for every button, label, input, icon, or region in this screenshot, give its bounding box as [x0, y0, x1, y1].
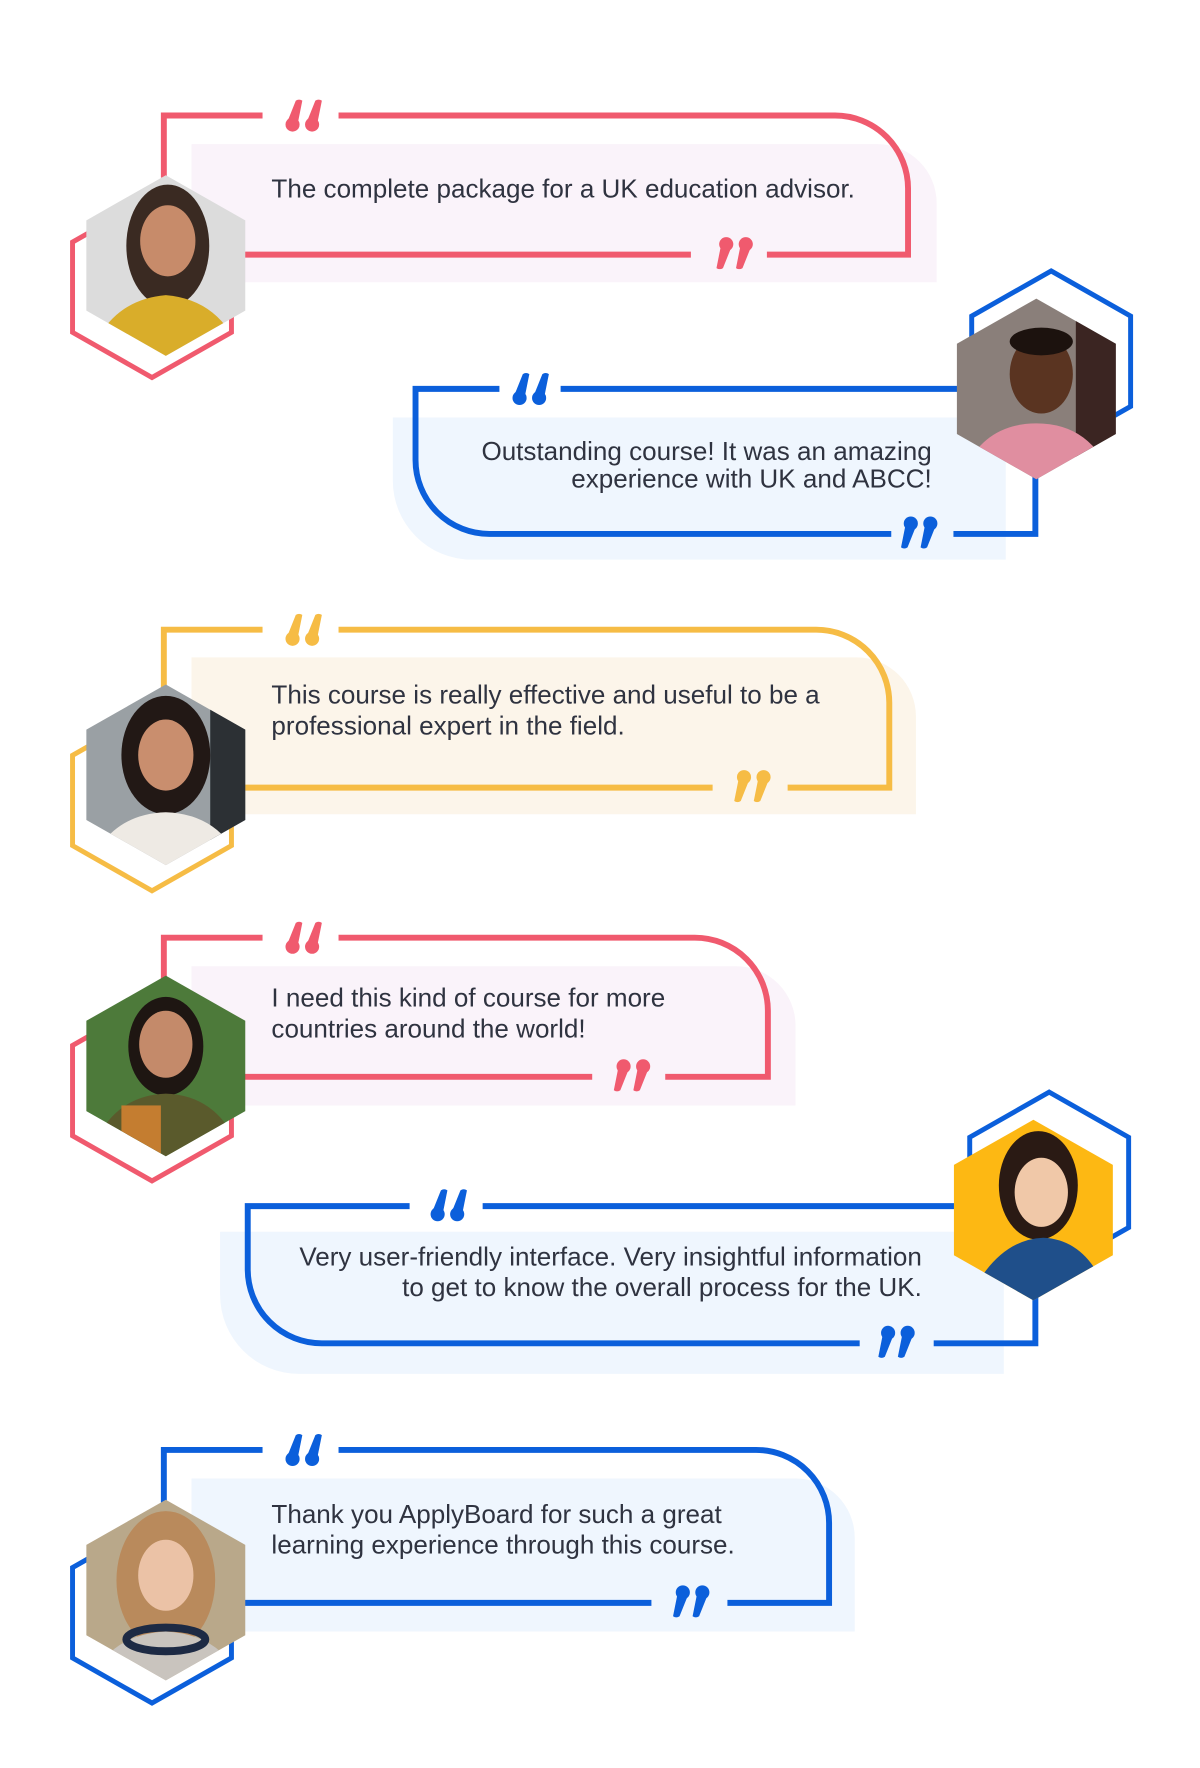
- card 4: more countries: countries around the world!: [271, 1013, 586, 1043]
- card 6: thank you ApplyBoard: [164, 1434, 855, 1632]
- icon: opening quote: [285, 100, 322, 132]
- card 5: user-friendly interface: to get to know the overall process for the UK.: [402, 1272, 922, 1302]
- icon: opening quote: [512, 373, 549, 405]
- card 2: outstanding course: experience with UK and ABCC!: [571, 464, 932, 494]
- icon: opening quote: [285, 922, 322, 954]
- icon: opening quote: [285, 614, 322, 646]
- quote text: The complete package for a UK education advisor.: [271, 173, 855, 203]
- card 5: user-friendly interface: [220, 1189, 1035, 1374]
- icon: opening quote: [285, 1434, 322, 1466]
- quote text: This course is really effective and useful to be a: [271, 680, 820, 710]
- card 2: outstanding course: [393, 373, 1035, 560]
- icon: closing quote: [614, 1059, 650, 1091]
- card 6: thank you ApplyBoard: learning experience through this course.: [271, 1530, 735, 1560]
- card 4: more countries: [164, 922, 796, 1105]
- avatar 6: [73, 1491, 255, 1703]
- quote text: Thank you ApplyBoard for such a great: [271, 1499, 722, 1529]
- avatar 1: [73, 167, 255, 378]
- card 3: effective course: professional expert in the field.: [271, 710, 625, 740]
- icon: closing quote: [901, 516, 937, 548]
- icon: closing quote: [878, 1326, 915, 1358]
- avatar 2: [948, 271, 1131, 488]
- icon: opening quote: [431, 1189, 467, 1221]
- icon: closing quote: [673, 1585, 709, 1617]
- avatar 3: [73, 676, 255, 891]
- icon: closing quote: [716, 237, 753, 269]
- card 1: UK education advisor: [164, 100, 937, 282]
- icon: closing quote: [734, 770, 771, 802]
- avatar 5: [945, 1092, 1129, 1309]
- quote text: Very user-friendly interface. Very insightful information: [299, 1241, 922, 1271]
- card 3: effective course: [164, 614, 916, 814]
- avatar 4: [73, 967, 255, 1181]
- quote text: Outstanding course! It was an amazing: [481, 436, 932, 466]
- quote text: I need this kind of course for more: [271, 983, 665, 1013]
